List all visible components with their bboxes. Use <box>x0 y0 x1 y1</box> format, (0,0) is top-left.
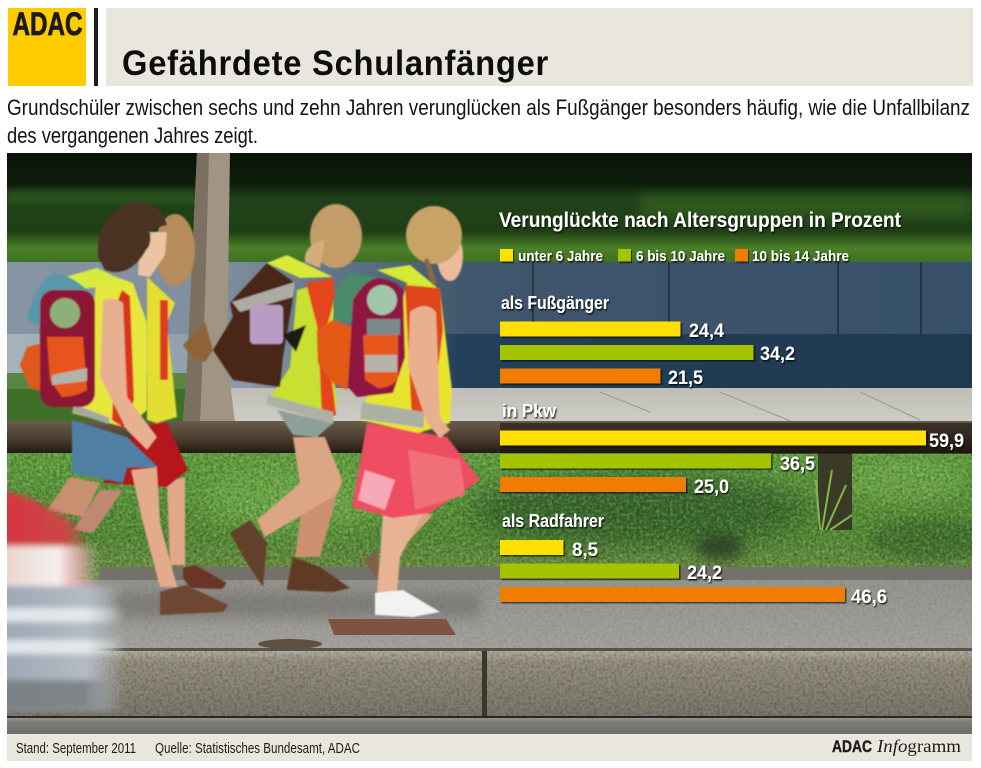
chart: Verunglückte nach Altersgruppen <box>499 209 964 608</box>
head <box>138 232 167 277</box>
fence post <box>816 450 852 530</box>
source text <box>16 741 360 757</box>
group: in Pkw: 59,9 <box>929 431 964 452</box>
child 4: pink skirt, red backpack <box>317 206 480 617</box>
background: light paving <box>230 388 972 421</box>
group: als Fußgänger: 24,4 <box>689 321 724 342</box>
group: in Pkw: 36,5 <box>780 454 815 475</box>
group: in Pkw: 25,0 <box>694 477 729 498</box>
tree trunk <box>183 153 235 423</box>
legend: 6 bis 10 Jahre <box>636 248 725 265</box>
sidewalk <box>70 580 972 648</box>
group: als Radfahrer: 24,2 <box>687 563 722 584</box>
title banner: Gefährdete Schulanfänger <box>122 43 549 83</box>
group: als Radfahrer: 46,6 <box>851 587 887 608</box>
credit: ADAC Infogramm: Infogramm <box>876 736 961 756</box>
backpack <box>333 273 377 323</box>
blurred passing car <box>0 488 125 711</box>
group: in Pkw <box>500 400 964 498</box>
logo: ADAC: ADAC <box>12 6 82 42</box>
background: upper lawn <box>7 153 972 265</box>
background: concrete wall <box>7 262 972 336</box>
road <box>7 716 972 734</box>
group: als Fußgänger: 34,2 <box>760 344 795 365</box>
head <box>436 242 464 282</box>
lower grass <box>7 450 981 582</box>
legend: unter 6 Jahre <box>518 248 603 265</box>
source text: Quelle: Statistisches Bundesamt, ADAC <box>155 741 360 757</box>
legend: 10 bis 14 Jahre <box>752 248 849 265</box>
group: als Radfahrer: als Radfahrer <box>502 510 604 531</box>
child 2: behind, red dotted skirt <box>73 214 227 589</box>
background: left grass patch <box>7 373 186 421</box>
legend <box>500 248 849 265</box>
intro text <box>7 95 970 148</box>
backpack <box>27 273 87 325</box>
group: in Pkw: in Pkw <box>502 400 557 421</box>
logo: ADAC <box>8 6 86 86</box>
group: als Fußgänger: 21,5 <box>668 368 703 389</box>
stone kerb <box>7 648 972 718</box>
credit: ADAC Infogramm <box>832 736 961 756</box>
photo: schoolchildren walking along the street <box>0 153 981 734</box>
title banner <box>106 8 973 86</box>
group: als Radfahrer: 8,5 <box>572 540 598 561</box>
group: als Radfahrer <box>500 510 887 608</box>
intro text: des vergangenen Jahres zeigt. <box>7 123 258 148</box>
group: als Fußgänger <box>500 292 795 389</box>
child 1: dark hair, denim shorts, red backpack <box>20 202 228 615</box>
wooden fence rail <box>7 421 972 453</box>
footer bar <box>7 734 972 761</box>
divider bar <box>94 8 98 86</box>
kerb strip <box>100 567 972 581</box>
chart title: Verunglückte nach Altersgruppen in Prozent <box>499 209 901 232</box>
group: als Fußgänger: als Fußgänger <box>501 292 609 313</box>
child 3: brown backpack, grey shorts <box>183 204 362 592</box>
credit: ADAC Infogramm: ADAC <box>832 738 872 756</box>
background: path in shade <box>7 334 972 390</box>
source text: Stand: September 2011 <box>16 741 136 757</box>
